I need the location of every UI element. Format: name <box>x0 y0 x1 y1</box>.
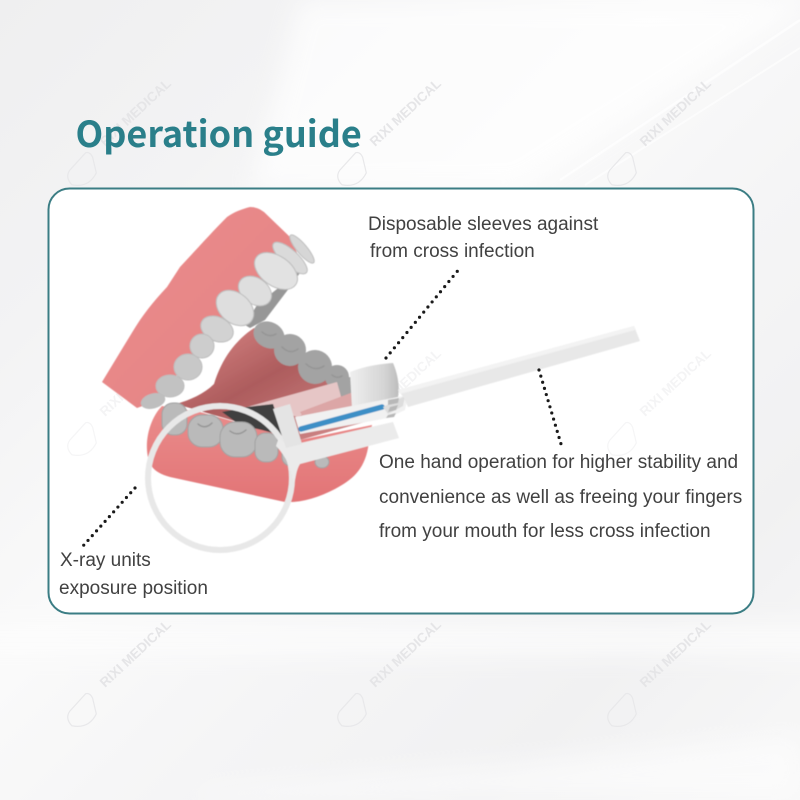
lower back teeth <box>249 316 363 401</box>
holder block <box>273 404 302 448</box>
label: disposable sleeves: from cross infection <box>370 241 535 262</box>
handle stick <box>398 326 640 407</box>
watermarks: RIXI MEDICAL <box>637 617 714 690</box>
label: exposure position: exposure position <box>59 578 208 599</box>
lower tooth creases <box>198 423 246 434</box>
callout: exposure dotted line <box>83 488 135 546</box>
label: exposure position: X-ray units <box>60 550 151 571</box>
back tooth creases <box>262 332 342 377</box>
watermarks: RIXI MEDICAL <box>637 76 714 149</box>
callout: handle dotted line <box>539 370 561 444</box>
blue sensor bar <box>301 407 382 429</box>
tissue behind sensor <box>300 385 375 428</box>
dark throat shadow <box>222 404 284 436</box>
watermarks inside panel <box>60 346 722 462</box>
upper gum <box>102 207 298 408</box>
watermarks inside panel: RIXI MEDICAL <box>367 346 444 419</box>
watermarks inside panel: RIXI MEDICAL <box>637 346 714 419</box>
dental model illustration <box>102 207 640 550</box>
panel: operation diagram <box>48 188 754 614</box>
label: disposable sleeves: Disposable sleeves against <box>368 214 599 235</box>
lower gum <box>147 406 372 502</box>
inner mouth <box>176 328 372 440</box>
sleeve cylinder <box>350 363 399 408</box>
positioning ring <box>148 406 292 550</box>
lower front teeth <box>162 403 329 468</box>
label: one hand operation: from your mouth for less cross infection <box>379 521 711 542</box>
watermarks inside panel: RIXI MEDICAL <box>97 346 174 419</box>
watermarks: RIXI MEDICAL <box>367 76 444 149</box>
holder clips <box>383 396 405 414</box>
upper back teeth shadow <box>245 270 302 328</box>
callout: sleeve dotted line <box>386 268 460 358</box>
watermarks: RIXI MEDICAL <box>97 76 174 149</box>
watermarks: RIXI MEDICAL <box>97 617 174 690</box>
ring arm <box>276 422 399 484</box>
label: disposable sleeves <box>368 214 599 262</box>
title: Operation guide <box>76 106 362 158</box>
watermarks: RIXI MEDICAL <box>367 617 444 690</box>
watermarks <box>60 76 722 733</box>
film sleeve translucent band <box>247 382 342 417</box>
label: one hand operation <box>379 452 742 542</box>
label: exposure position <box>59 550 208 599</box>
label: one hand operation: One hand operation for higher stability and <box>379 452 738 473</box>
sensor strip <box>295 395 408 434</box>
upper teeth <box>140 232 317 411</box>
label: one hand operation: convenience as well as freeing your fingers <box>379 487 742 508</box>
